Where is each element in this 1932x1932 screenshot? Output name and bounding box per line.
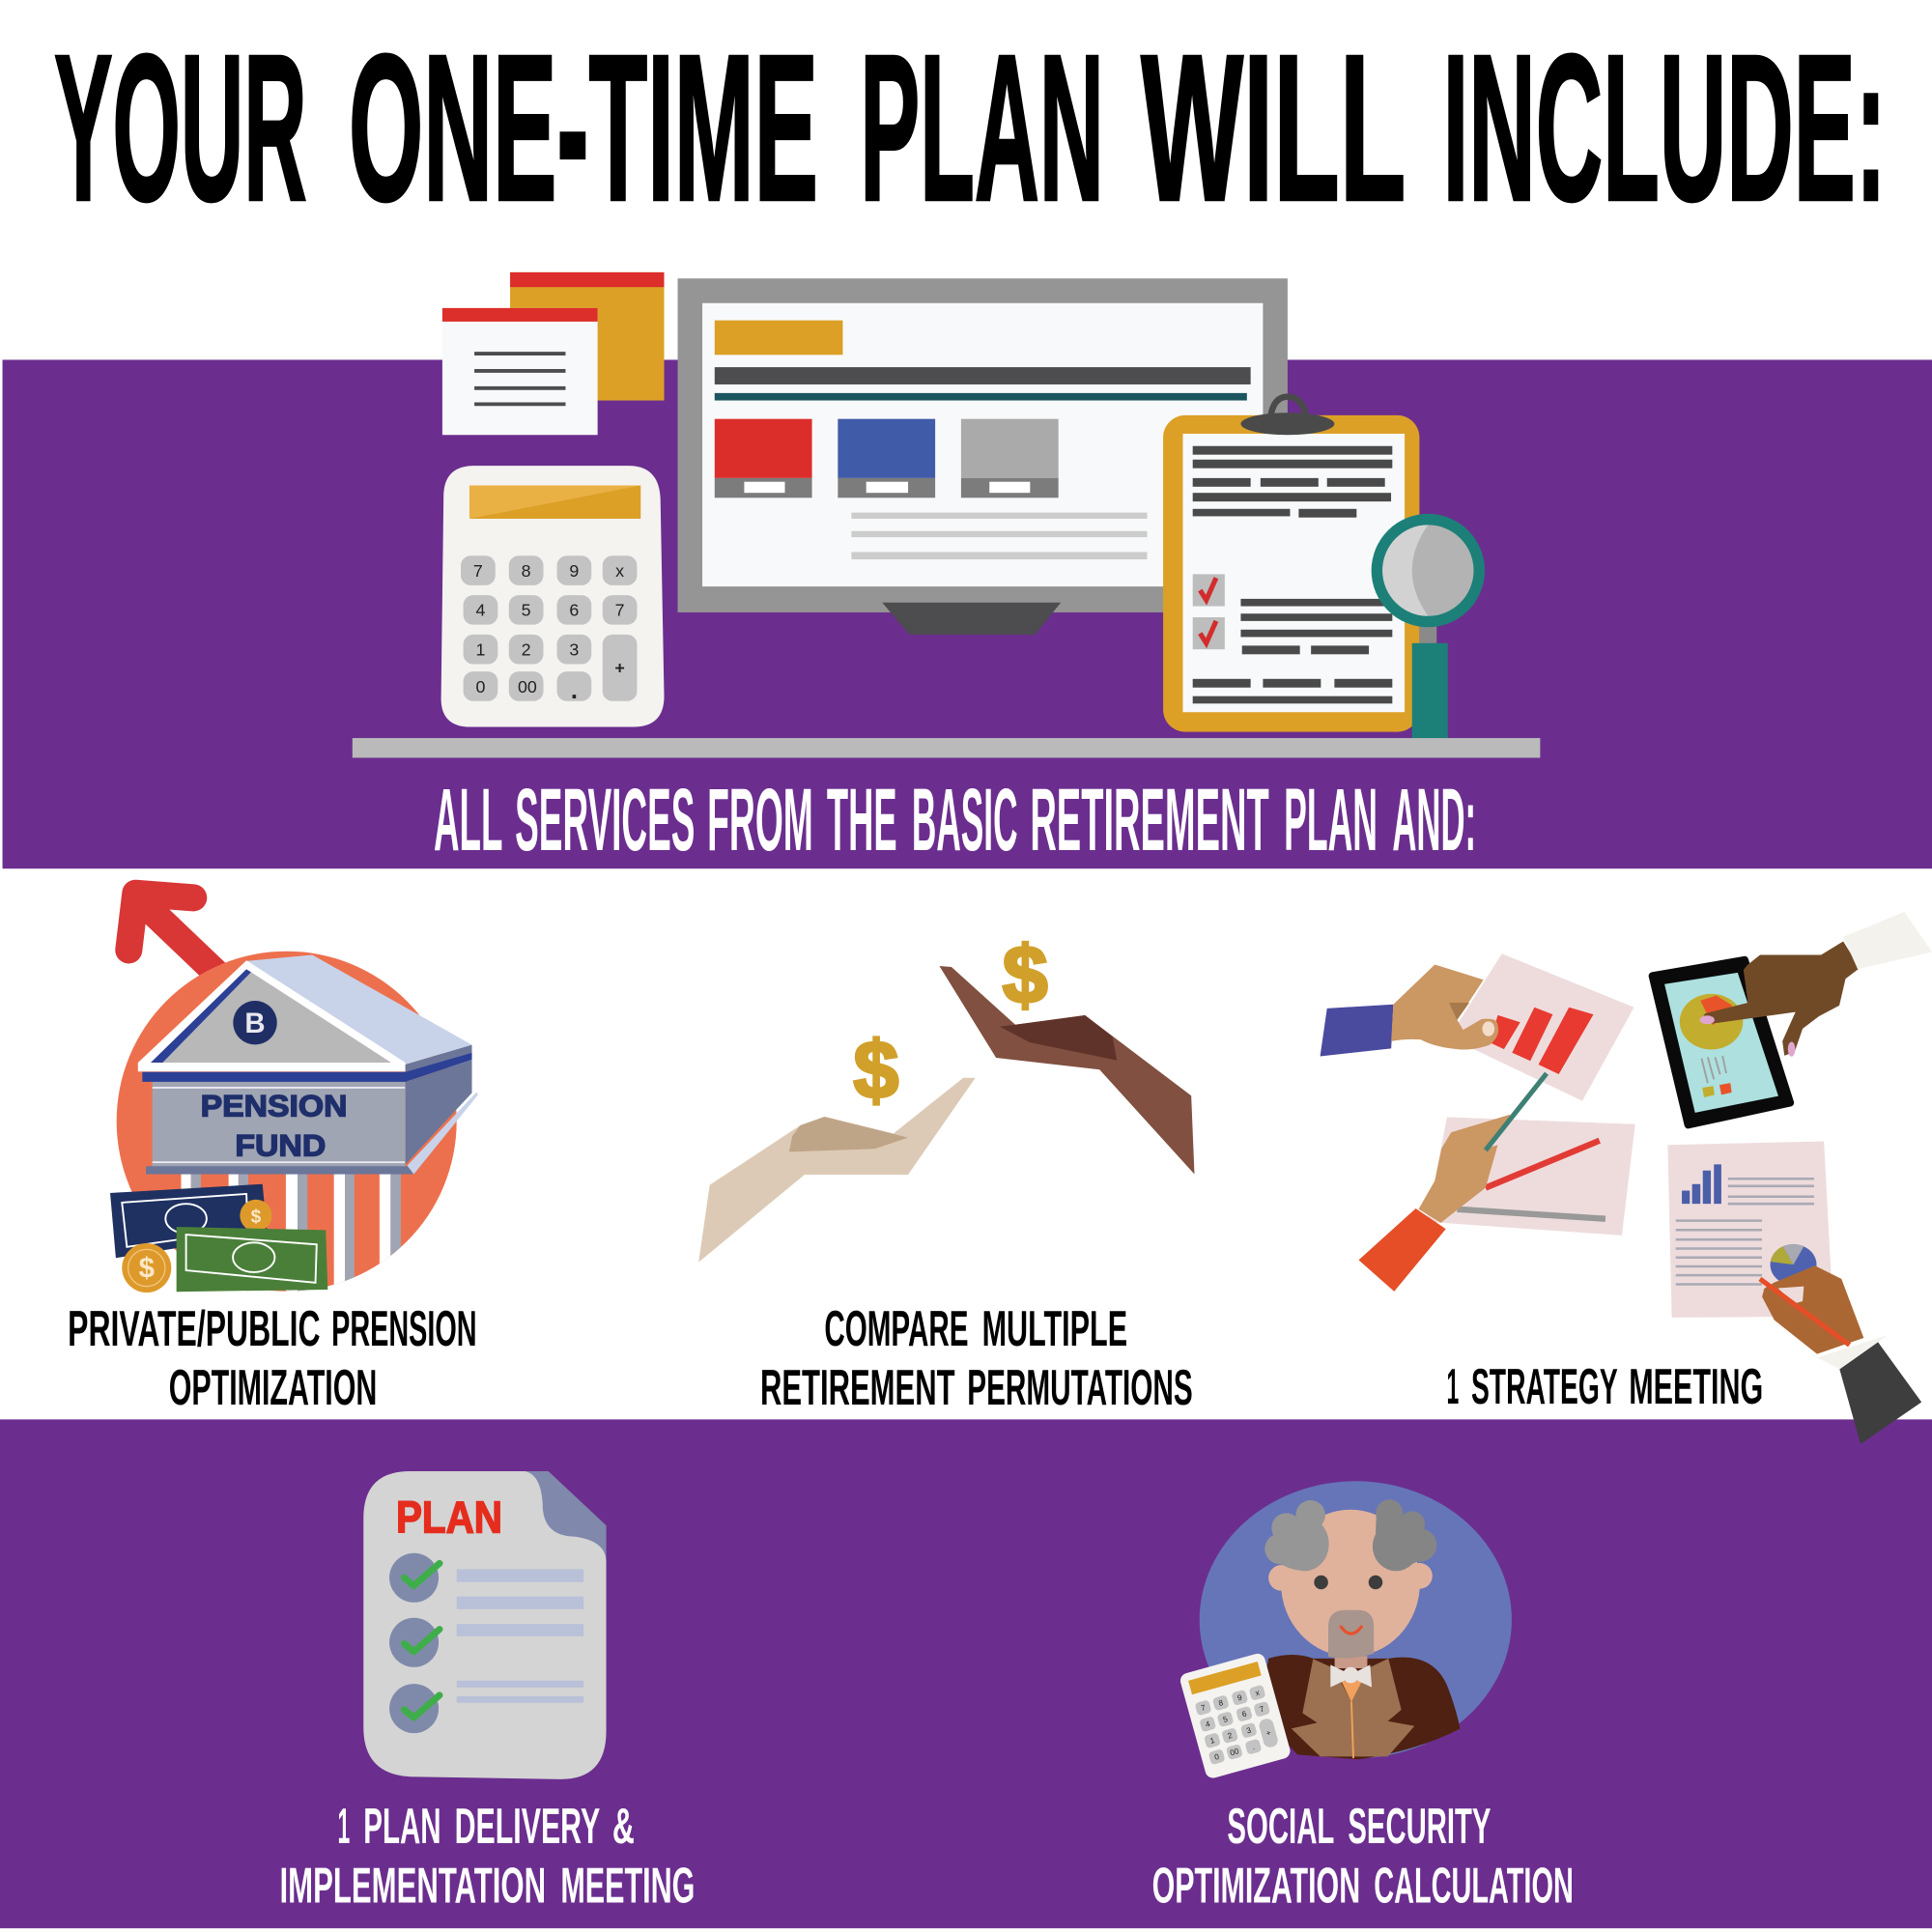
calculator: 8 [522, 561, 531, 581]
label: social security: SECURITY [1348, 1799, 1491, 1855]
paper: report [1667, 1142, 1833, 1318]
label: social security: SOCIAL [1227, 1799, 1334, 1855]
subtitle: FROM [707, 771, 813, 869]
small calculator: x [1254, 1689, 1261, 1697]
subtitle: RETIREMENT [1030, 771, 1269, 869]
label: pension optimization: PRENSION [331, 1301, 477, 1357]
label: strategy meeting: STRATEGY [1471, 1359, 1618, 1415]
label: strategy meeting: MEETING [1629, 1359, 1763, 1415]
small calculator: 7 [1200, 1703, 1207, 1713]
shelf [353, 738, 1540, 757]
label: plan delivery [280, 1799, 695, 1914]
label: social security: CALCULATION [1374, 1858, 1574, 1914]
subtitle: THE [827, 771, 897, 869]
label: compare permutations: RETIREMENT [760, 1360, 955, 1416]
label: plan delivery: DELIVERY [455, 1799, 600, 1855]
small calculator: 6 [1241, 1709, 1248, 1719]
icon: plan document [363, 1471, 607, 1779]
icon: hands exchanging money [698, 929, 1194, 1263]
label: plan delivery: IMPLEMENTATION [280, 1858, 546, 1914]
title: YOUR [54, 12, 307, 244]
label: social security [1152, 1799, 1574, 1914]
calculator: x [615, 561, 624, 581]
icon: strategy meeting hands and papers [1321, 912, 1932, 1444]
head [1268, 1565, 1294, 1591]
small calculator: 3 [1245, 1725, 1253, 1735]
calculator: 5 [522, 601, 531, 620]
small calculator [1179, 1652, 1292, 1779]
subtitle: PLAN [1284, 771, 1378, 869]
calculator: 7 [473, 561, 483, 581]
magnifying glass [1372, 514, 1485, 738]
small calculator: 1 [1209, 1736, 1216, 1746]
subtitle: BASIC [912, 771, 1018, 869]
calculator: . [571, 677, 578, 704]
infographic: AND: [1392, 771, 1476, 869]
small calculator: 9 [1236, 1693, 1243, 1703]
hand: pointing at tablet [1700, 912, 1932, 1057]
subtitle: ALL [434, 771, 502, 869]
calculator: 9 [569, 561, 579, 581]
label: compare permutations: COMPARE [824, 1301, 969, 1357]
label: compare permutations: PERMUTATIONS [967, 1360, 1193, 1416]
label: compare permutations: MULTIPLE [982, 1301, 1127, 1357]
calculator: 0 [475, 677, 485, 696]
calculator: 4 [475, 601, 485, 620]
money: $ [251, 1207, 262, 1227]
calculator: 00 [518, 677, 537, 696]
calculator: 7 [615, 601, 625, 620]
money: $ [139, 1253, 155, 1285]
small calculator: 00 [1229, 1747, 1240, 1757]
label: social security: OPTIMIZATION [1152, 1858, 1360, 1914]
label: compare permutations [760, 1301, 1193, 1416]
icon: plan document: PLAN [396, 1492, 502, 1543]
calculator: 1 [475, 640, 485, 660]
icon: pension fund building: B [244, 1008, 266, 1039]
purple band: bottom [0, 1419, 1932, 1928]
money [110, 1184, 327, 1293]
sticky notes [442, 272, 665, 435]
subtitle: SERVICES [515, 771, 695, 869]
jacket [1257, 1655, 1460, 1759]
label: plan delivery: MEETING [560, 1858, 695, 1914]
calculator: + [614, 659, 625, 678]
label: pension optimization: OPTIMIZATION [169, 1360, 377, 1416]
purple band: top [3, 359, 1932, 868]
small calculator: 4 [1205, 1719, 1211, 1729]
label: pension optimization [68, 1301, 477, 1416]
small calculator: 7 [1259, 1704, 1265, 1714]
small calculator: 0 [1213, 1752, 1221, 1762]
title: WILL [1141, 12, 1406, 244]
calculator: 3 [569, 640, 579, 660]
hand: writing on report [1760, 1265, 1921, 1444]
arrow [128, 894, 219, 976]
hand: holding pencil [1359, 1073, 1547, 1292]
hand: blue sleeve [1321, 964, 1498, 1056]
calculator: 6 [569, 601, 579, 620]
tablet [1652, 960, 1790, 1125]
small calculator: 8 [1217, 1698, 1225, 1708]
paper: line chart [1427, 1117, 1635, 1236]
label: plan delivery: 1 [337, 1799, 350, 1855]
label: plan delivery: PLAN [363, 1799, 441, 1855]
small calculator: 2 [1227, 1731, 1234, 1741]
clipboard [1163, 397, 1419, 732]
icon: hands exchanging money: $ [1003, 929, 1048, 1020]
label: strategy meeting: 1 [1446, 1359, 1459, 1415]
title: PLAN [860, 12, 1104, 244]
calculator: 2 [522, 640, 531, 660]
icon: pension fund building [110, 894, 478, 1293]
icon: pension fund building: FUND [235, 1127, 326, 1162]
monitor [678, 278, 1288, 635]
small calculator: 5 [1222, 1715, 1229, 1724]
icon: pension fund building: PENSION [201, 1089, 347, 1123]
paper: bar chart [1449, 953, 1634, 1101]
small calculator: . [1251, 1743, 1256, 1751]
label: pension optimization: PRIVATE/PUBLIC [68, 1301, 321, 1357]
title: ONE-TIME [349, 12, 818, 244]
icon: hands exchanging money: $ [853, 1024, 898, 1115]
label: plan delivery: & [612, 1799, 635, 1855]
small calculator: + [1265, 1728, 1272, 1738]
icon: man with calculator [1179, 1481, 1512, 1779]
calculator [441, 466, 665, 727]
